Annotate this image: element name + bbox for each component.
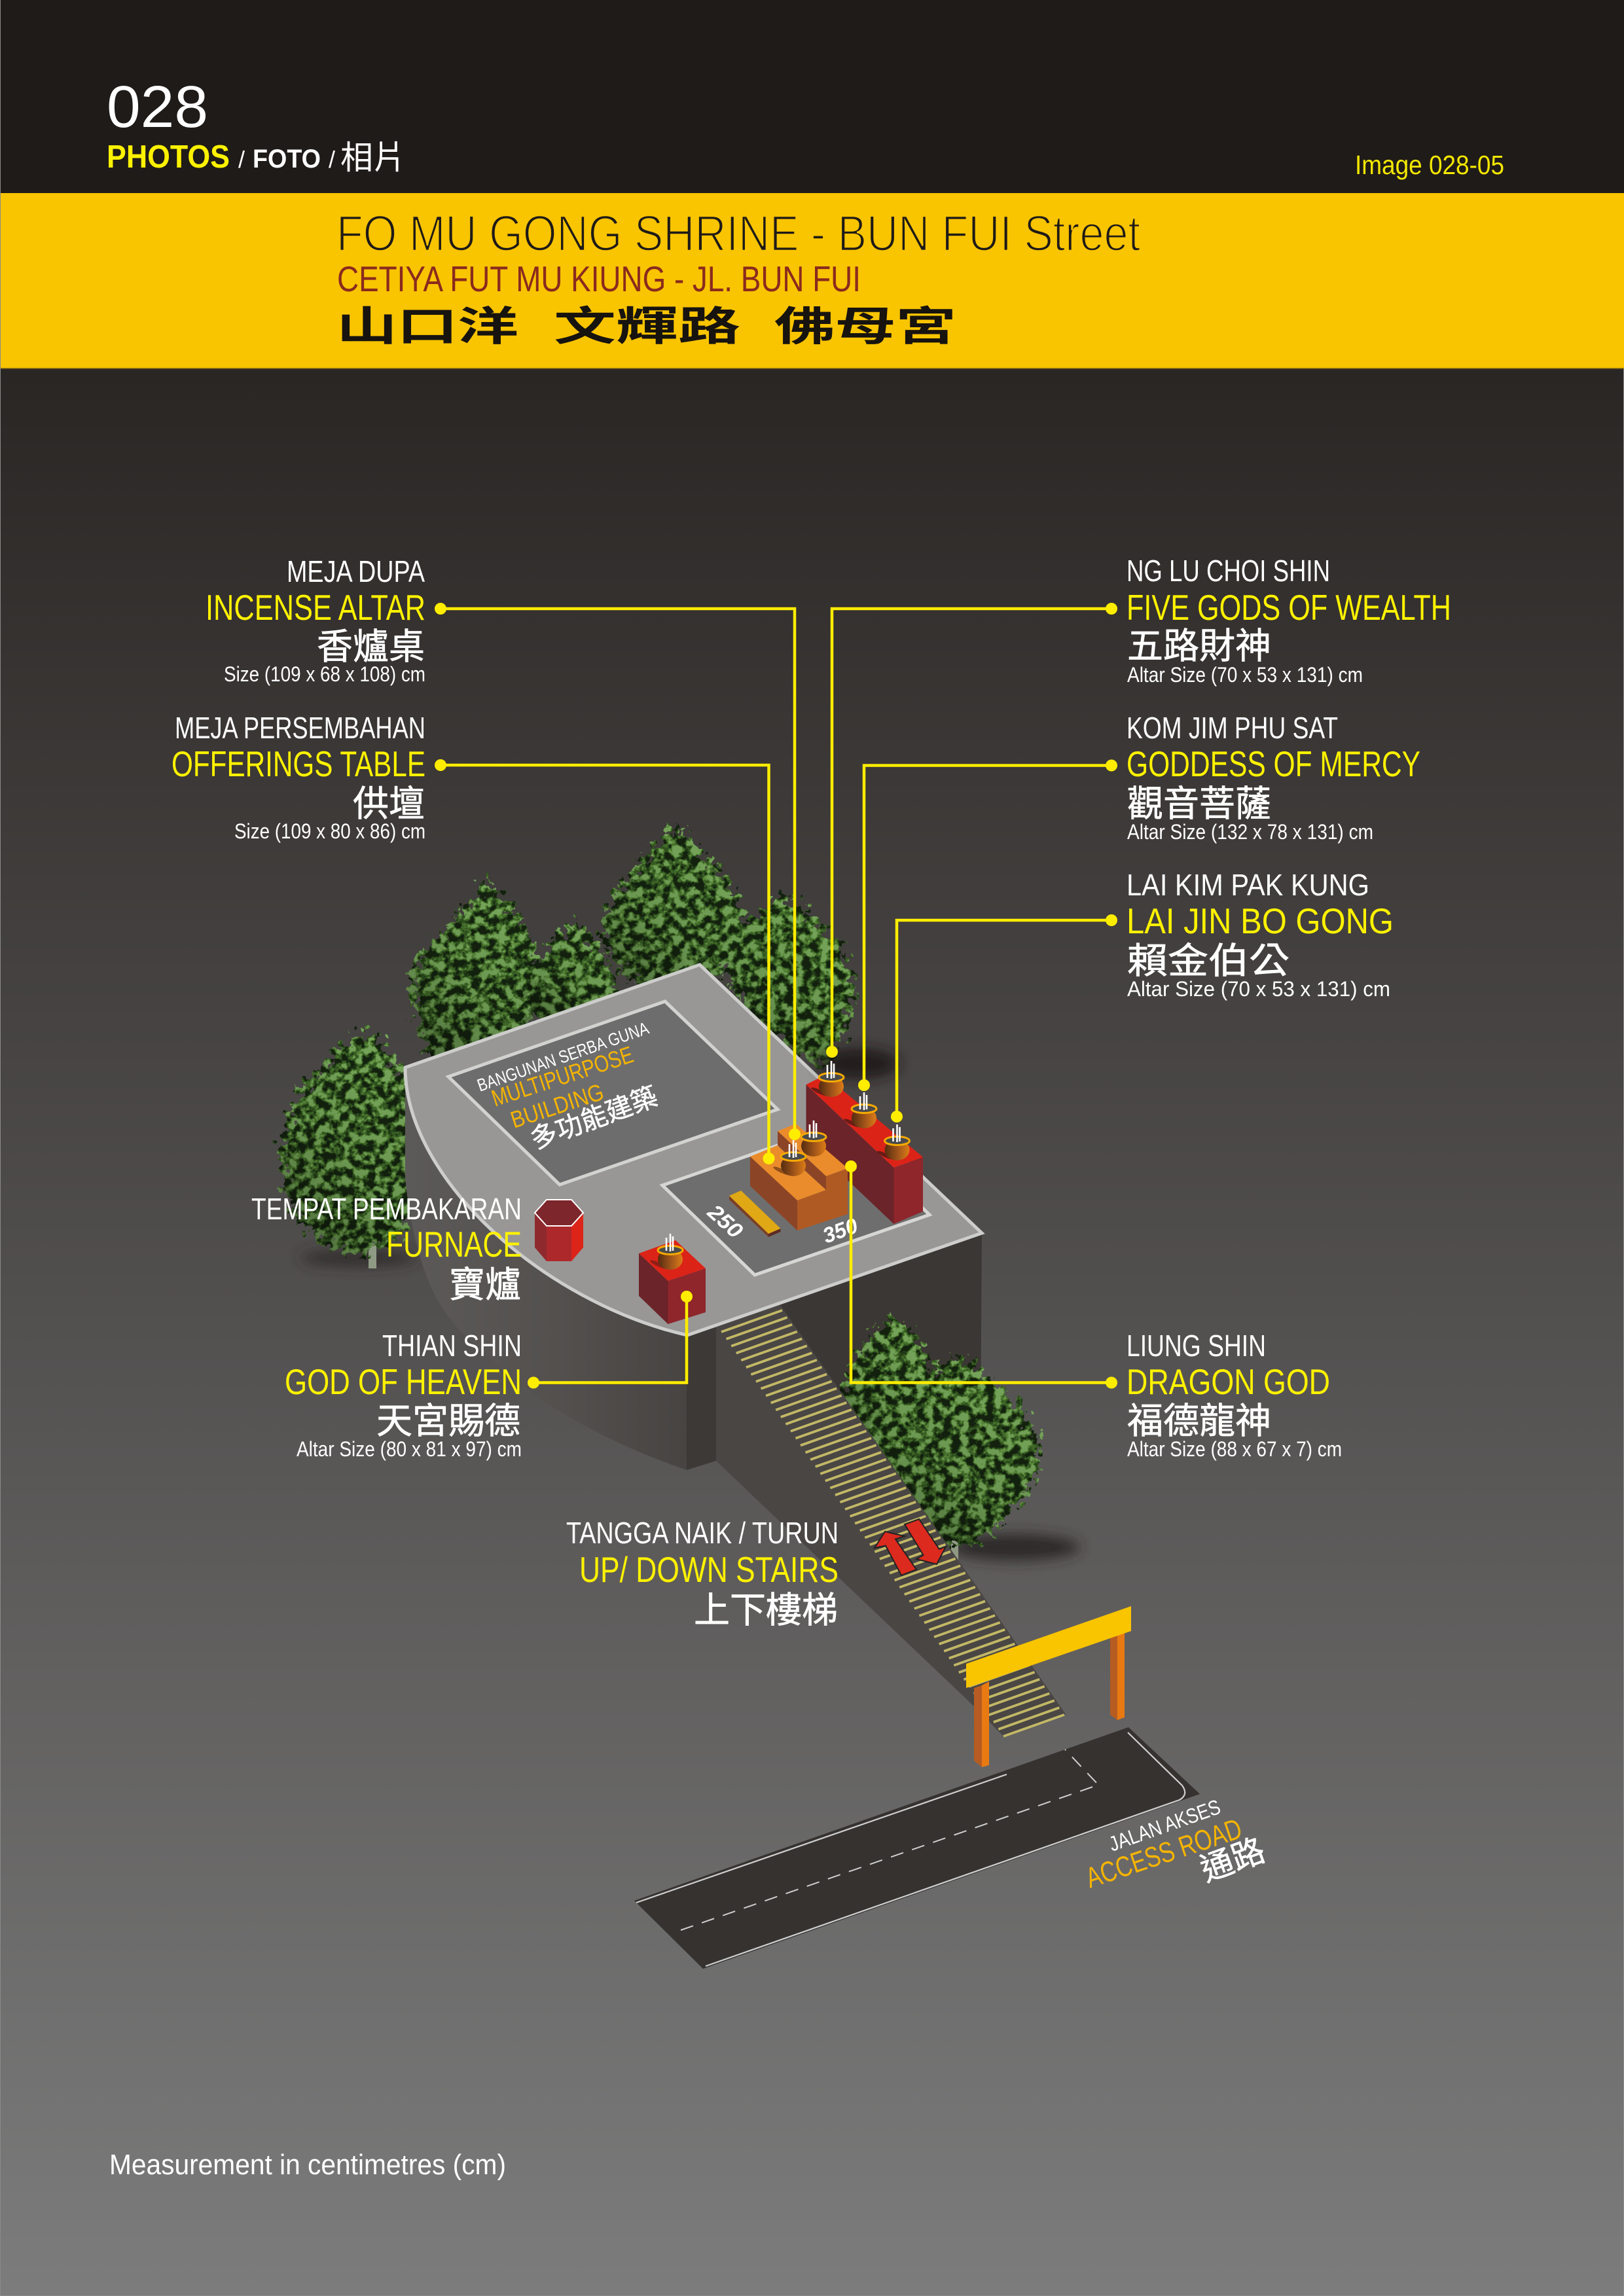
access road xyxy=(634,1727,1270,1969)
section label: / xyxy=(329,146,335,173)
title band xyxy=(1,193,1624,369)
label: god of heaven: THIAN SHIN xyxy=(382,1329,522,1363)
page number: 028 xyxy=(107,75,208,140)
label: goddess of mercy xyxy=(1127,711,1420,844)
section label: FOTO xyxy=(253,145,321,173)
label: god of heaven xyxy=(285,1329,522,1461)
road labels: ACCESS ROAD xyxy=(1082,1812,1246,1894)
label: goddess of mercy: Altar Size (132 x 78 x 131) cm xyxy=(1127,820,1373,844)
label: dragon god: LIUNG SHIN xyxy=(1127,1329,1266,1363)
label: five gods of wealth: Altar Size (70 x 53 x 131) cm xyxy=(1127,663,1363,687)
label: offerings table: OFFERINGS TABLE xyxy=(171,744,425,784)
building labels xyxy=(475,1018,662,1155)
title chinese: 山口洋 xyxy=(336,304,518,350)
label: lai jin bo gong: LAI JIN BO GONG xyxy=(1127,901,1394,941)
title malay: CETIYA FUT MU KIUNG - JL. BUN FUI xyxy=(337,259,861,299)
label: furnace: TEMPAT PEMBAKARAN xyxy=(251,1192,522,1226)
title chinese: 文輝路 xyxy=(554,304,740,350)
building labels: BUILDING xyxy=(507,1078,607,1134)
orange offering altar xyxy=(750,1124,848,1230)
label: offerings table: 供壇 xyxy=(353,783,425,824)
label: lai jin bo gong xyxy=(1127,868,1394,1001)
label: lai jin bo gong: LAI KIM PAK KUNG xyxy=(1127,868,1369,902)
label: offerings table: MEJA PERSEMBAHAN xyxy=(175,711,425,745)
label: lai jin bo gong: 賴金伯公 xyxy=(1127,941,1290,981)
label: dragon god: DRAGON GOD xyxy=(1127,1361,1330,1402)
road labels: JALAN AKSES xyxy=(1106,1795,1223,1856)
dimension 350: 350 xyxy=(820,1213,861,1248)
entrance gate xyxy=(966,1606,1131,1767)
platform top xyxy=(405,965,982,1335)
label: furnace xyxy=(251,1192,522,1305)
building labels: MULTIPURPOSE xyxy=(488,1041,636,1112)
label: god of heaven: GOD OF HEAVEN xyxy=(285,1361,522,1402)
altar courtyard xyxy=(662,1125,929,1275)
label: offerings table: Size (109 x 80 x 86) cm xyxy=(234,819,425,843)
trees behind platform xyxy=(281,823,854,1268)
label: god of heaven: 天宮賜德 xyxy=(376,1401,520,1441)
label: incense altar xyxy=(206,554,425,686)
label: incense altar: 香爐桌 xyxy=(317,626,425,667)
section label: PHOTOS xyxy=(107,139,230,175)
label: five gods of wealth: 五路財神 xyxy=(1127,626,1271,666)
label: five gods of wealth: FIVE GODS OF WEALTH xyxy=(1127,587,1451,628)
measurement note: Measurement in centimetres (cm) xyxy=(109,2149,506,2181)
label: god of heaven: Altar Size (80 x 81 x 97) cm xyxy=(297,1437,522,1461)
long red altar shadow xyxy=(818,1048,899,1079)
multipurpose building xyxy=(448,1001,778,1185)
platform walls xyxy=(405,1067,982,1532)
label: stairs xyxy=(566,1516,839,1630)
heaven altar xyxy=(639,1240,706,1324)
label: goddess of mercy: GODDESS OF MERCY xyxy=(1127,744,1420,784)
label: dragon god xyxy=(1127,1329,1342,1461)
label: incense altar: MEJA DUPA xyxy=(287,554,425,588)
furnace xyxy=(535,1200,583,1261)
section label: / xyxy=(238,146,245,173)
label: furnace: FURNACE xyxy=(386,1224,522,1265)
label: lai jin bo gong: Altar Size (70 x 53 x 131) cm xyxy=(1127,977,1390,1001)
label: incense altar: INCENSE ALTAR xyxy=(206,587,425,628)
leader lines xyxy=(435,603,1117,1389)
title chinese: 佛母宮 xyxy=(774,304,956,350)
label: incense altar: Size (109 x 68 x 108) cm xyxy=(224,662,425,686)
foreground trees xyxy=(842,1316,1080,1560)
label: five gods of wealth: NG LU CHOI SHIN xyxy=(1127,554,1330,588)
label: five gods of wealth xyxy=(1127,554,1451,687)
dimension 250: 250 xyxy=(703,1199,748,1243)
title chinese xyxy=(336,304,956,350)
label: dragon god: Altar Size (88 x 67 x 7) cm xyxy=(1127,1437,1342,1461)
label: dragon god: 福德龍神 xyxy=(1127,1401,1271,1441)
label: offerings table xyxy=(171,711,425,843)
label: goddess of mercy: 觀音菩薩 xyxy=(1127,783,1271,824)
header band xyxy=(1,0,1624,193)
building labels: 多功能建築 xyxy=(526,1081,662,1155)
incense pots xyxy=(649,1061,910,1270)
building labels: BANGUNAN SERBA GUNA xyxy=(475,1018,651,1096)
label: stairs: TANGGA NAIK / TURUN xyxy=(566,1516,839,1550)
section label xyxy=(107,139,406,176)
kneeling step xyxy=(729,1191,780,1237)
label: goddess of mercy: KOM JIM PHU SAT xyxy=(1127,711,1338,745)
long red altar xyxy=(806,1075,923,1224)
image reference: Image 028-05 xyxy=(1355,150,1504,180)
label: stairs: 上下樓梯 xyxy=(694,1590,838,1630)
label: stairs: UP/ DOWN STAIRS xyxy=(579,1549,839,1590)
stairs xyxy=(716,1299,1066,1736)
road labels: 通路 xyxy=(1196,1832,1270,1888)
title english: FO MU GONG SHRINE - BUN FUI Street xyxy=(336,206,1140,262)
section label: 相片 xyxy=(340,139,406,176)
label: furnace: 寶爐 xyxy=(449,1265,521,1305)
stair direction arrows xyxy=(875,1519,946,1575)
